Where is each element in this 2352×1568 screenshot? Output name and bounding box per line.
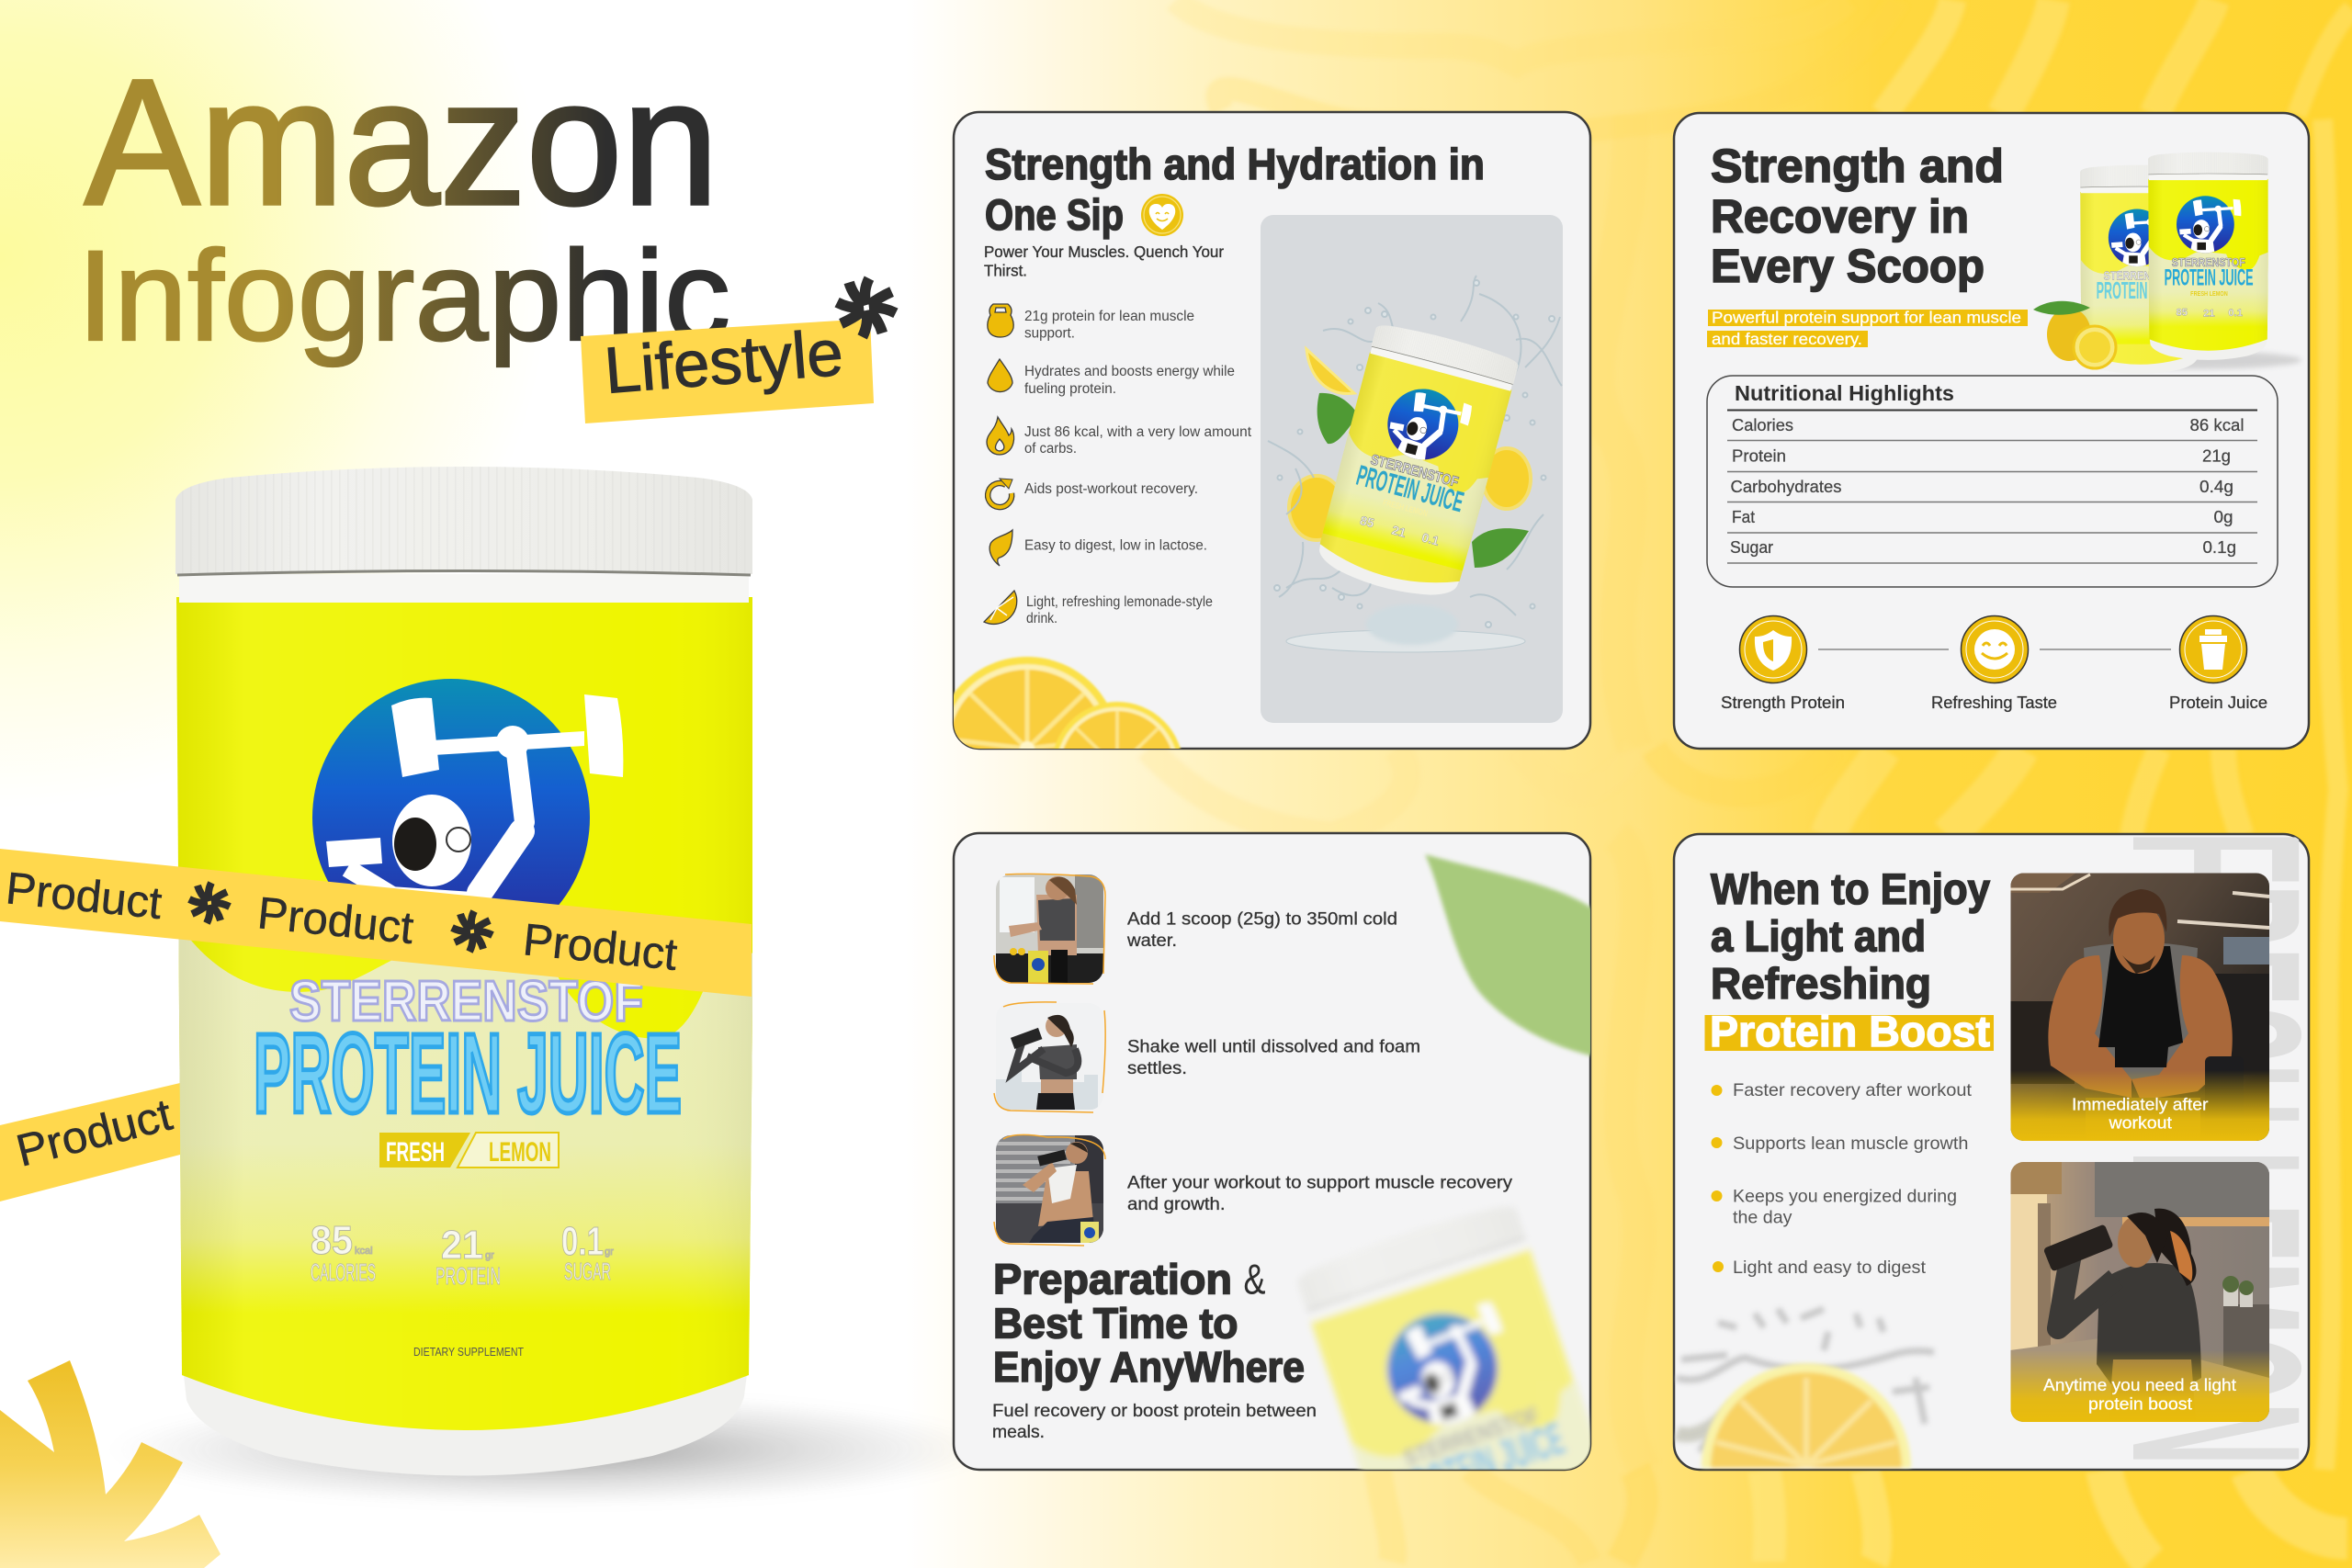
- jar label: stats: CALORIES: [311, 1258, 376, 1286]
- highlighted subheading: [1707, 309, 2028, 348]
- decorative sunburst bottom left: [0, 1360, 220, 1568]
- icon: pinwheel: [189, 883, 230, 923]
- labels: Refreshing Taste: [1931, 693, 2057, 712]
- tilted product jar: 85: [1359, 513, 1376, 531]
- front jar: 85: [2177, 308, 2188, 319]
- back jar: [2080, 165, 2201, 375]
- jar label: flavour tag: FRESH: [386, 1137, 445, 1168]
- back jar: PROTEIN JUICE: [2097, 278, 2185, 304]
- text: protein: 21g protein for lean muscle: [1024, 309, 1194, 324]
- product jars with lemon: [2033, 152, 2301, 375]
- step 1 thumbnail: [994, 874, 1105, 984]
- icon: kettlebell: [988, 304, 1013, 337]
- subheading: Power Your Muscles. Quench Your: [984, 243, 1224, 261]
- product splash photo: [1261, 215, 1563, 723]
- tilted product jar: STERRENSTOF: [1369, 452, 1460, 491]
- icon: tasty smile: [1961, 615, 2029, 683]
- icon: pinwheel: [452, 911, 492, 952]
- step 1 text: Add 1 scoop (25g) to 350ml cold: [1127, 909, 1397, 930]
- lemon and leaf: [2033, 301, 2116, 368]
- text: digest: Easy to digest, low in lactose.: [1024, 538, 1207, 553]
- photo: woman drinking: [2010, 1162, 2269, 1422]
- icon: black pinwheel star: [837, 278, 896, 337]
- heading: Strength and Hydration in: [985, 140, 1485, 188]
- subheading: Thirst.: [984, 261, 1027, 279]
- front jar: 0.1: [2228, 308, 2243, 319]
- blurred tilted jar: STERRENSTOF: [1401, 1403, 1543, 1472]
- title: Amazon Infographic: Amazon: [85, 42, 718, 243]
- benefit bullets: Keeps you energized during: [1733, 1187, 1957, 1207]
- ribbon: lower left product band: [0, 1083, 180, 1201]
- nutrition table: 0g: [2214, 507, 2233, 526]
- ribbon: main product band: Product: [521, 915, 680, 980]
- text: kcal: Just 86 kcal, with a very low amount: [1024, 424, 1252, 440]
- nutrition table: 21g: [2202, 446, 2231, 465]
- highlighted subheading: Powerful protein support for lean muscle: [1712, 309, 2021, 327]
- heading: Refreshing: [1711, 959, 1931, 1008]
- caption: [2043, 1375, 2236, 1413]
- benefit bullets: [1711, 1080, 1973, 1278]
- jar label: stats: SUGAR: [564, 1258, 611, 1285]
- heading: One Sip: [985, 190, 1124, 239]
- jar label: stats: kcal: [355, 1246, 373, 1257]
- nutrition table: Sugar: [1730, 537, 1773, 557]
- benefit bullets: Supports lean muscle growth: [1733, 1134, 1968, 1154]
- heading: [1711, 864, 1990, 1008]
- tilted product jar: FRESH LEMON: [1382, 498, 1429, 518]
- icon: water drop: [988, 359, 1012, 392]
- icon: smiling heart: [1141, 194, 1183, 236]
- heading: Preparation: [993, 1255, 1232, 1303]
- heading: Recovery in: [1711, 190, 1969, 243]
- back jar: STERRENSTOF: [2104, 268, 2177, 282]
- water base: [1286, 604, 1525, 652]
- highlighted subheading: and faster recovery.: [1712, 330, 1862, 348]
- text: protein: [1024, 309, 1194, 342]
- ribbon: lower left product band: Product: [12, 1090, 177, 1177]
- text: lemonade: Light, refreshing lemonade-style: [1026, 594, 1213, 610]
- step 2 text: Shake well until dissolved and foam: [1127, 1036, 1420, 1056]
- icon: shield: [1740, 615, 1806, 683]
- caption: workout: [2108, 1113, 2172, 1132]
- step 2 text: settles.: [1127, 1058, 1187, 1078]
- tag: Lifestyle: Lifestyle: [602, 317, 845, 408]
- tagline: Fuel recovery or boost protein between: [992, 1401, 1317, 1421]
- step 2 thumbnail: [994, 1002, 1105, 1112]
- labels: Protein Juice: [2169, 693, 2267, 712]
- text: recovery: Aids post-workout recovery.: [1024, 481, 1198, 497]
- caption: [2072, 1095, 2209, 1132]
- jar label: stats: PROTEIN: [435, 1262, 501, 1290]
- tagline: meals.: [992, 1422, 1045, 1442]
- step 3 thumbnail: [994, 1134, 1105, 1246]
- blurred tilted jar: PROTEIN JUICE: [1392, 1413, 1570, 1515]
- heading: [993, 1255, 1305, 1391]
- blurred tilted jar: [1299, 1208, 1590, 1470]
- lemon slices decoration: [954, 656, 1182, 749]
- heading: a Light and: [1711, 911, 1926, 961]
- heading: [985, 140, 1485, 239]
- panel: strength and hydration: [935, 112, 1590, 840]
- ground shadow under main jar: [110, 1393, 992, 1506]
- jar label: stats: gr: [605, 1247, 614, 1258]
- lemons and leaves behind jar: [1289, 349, 1531, 568]
- main product jar: [175, 467, 763, 1479]
- subheading: [984, 243, 1224, 279]
- front jar: FRESH LEMON: [2190, 289, 2228, 298]
- nutrition table: Nutritional Highlights: [1735, 381, 1954, 405]
- jar label: flavour tag: [379, 1133, 559, 1168]
- panel: strength and recovery: [1674, 113, 2309, 749]
- text: hydrates: fueling protein.: [1024, 381, 1116, 397]
- front jar: PROTEIN JUICE: [2165, 265, 2254, 290]
- text: lemonade: drink.: [1026, 611, 1057, 626]
- tagline: [992, 1401, 1317, 1442]
- jar label: flavour tag: LEMON: [489, 1137, 551, 1168]
- jar label: brand: STERRENSTOF: [289, 970, 643, 1033]
- heading: &: [1244, 1255, 1266, 1303]
- nutrition table: 0.4g: [2199, 477, 2233, 496]
- photo: man after workout: [2010, 873, 2269, 1141]
- benefit bullets: the day: [1733, 1207, 1792, 1227]
- ribbon: main product band: Product: [255, 888, 416, 953]
- benefit bullets: Light and easy to digest: [1733, 1258, 1927, 1278]
- icon: shaker: [2179, 615, 2247, 683]
- title: Amazon Infographic: [77, 42, 730, 367]
- heading: Strength and: [1711, 140, 2004, 192]
- ribbon: main product band: Product: [4, 863, 164, 929]
- text: kcal: [1024, 424, 1252, 457]
- blurred water splash: [1677, 1309, 1934, 1451]
- tilted product jar: PROTEIN JUICE: [1353, 459, 1467, 518]
- nutrition table: 0.1g: [2203, 537, 2236, 557]
- step 3 text: [1127, 1172, 1512, 1214]
- nutrition table: [1707, 376, 2278, 587]
- front jar: STERRENSTOF: [2172, 255, 2245, 269]
- text: kcal: of carbs.: [1024, 441, 1077, 457]
- icon: recovery arrow: [988, 479, 1012, 507]
- caption: protein boost: [2088, 1394, 2192, 1413]
- heading: When to Enjoy: [1711, 864, 1990, 913]
- blurred green leaf: [1425, 854, 1594, 1056]
- panel: preparation: [954, 833, 1611, 1557]
- highlighted heading: Protein Boost: [1710, 1007, 1990, 1055]
- jar label: stats: [311, 1218, 614, 1290]
- ribbon: main product band: [0, 849, 752, 997]
- labels: [1721, 693, 2267, 712]
- text: protein: support.: [1024, 325, 1075, 342]
- icon: flame: [987, 417, 1014, 455]
- heading: [1711, 140, 2004, 292]
- tilted product jar: [1311, 320, 1523, 608]
- caption: Anytime you need a light: [2043, 1375, 2236, 1394]
- nutrition table: Carbohydrates: [1731, 477, 1841, 496]
- text: hydrates: Hydrates and boosts energy while: [1024, 364, 1235, 379]
- main product jar: PROTEIN JUICE: [254, 1011, 682, 1137]
- icon: leaf: [989, 530, 1012, 566]
- nutrition table: Calories: [1732, 415, 1793, 434]
- text: lemonade: [1026, 594, 1213, 626]
- front jar: 21: [2203, 309, 2215, 320]
- title: Amazon Infographic: Infographic: [77, 223, 730, 367]
- feature icons row: [1721, 615, 2267, 712]
- step 3 text: and growth.: [1127, 1194, 1226, 1214]
- jar label: stats: 21: [441, 1223, 483, 1268]
- tilted product jar: 21: [1390, 524, 1408, 540]
- jar label: supplement note: DIETARY SUPPLEMENT: [413, 1345, 524, 1359]
- jar label: stats: gr: [485, 1250, 494, 1261]
- nutrition table: Fat: [1732, 507, 1755, 526]
- heading: Best Time to: [993, 1299, 1238, 1347]
- caption: Immediately after: [2072, 1095, 2209, 1113]
- tilted product jar: 0.1: [1420, 531, 1441, 548]
- step 2 text: [1127, 1036, 1420, 1078]
- step 3 text: After your workout to support muscle recovery: [1127, 1172, 1512, 1192]
- step 1 text: [1126, 909, 1397, 951]
- text: hydrates: [1024, 364, 1235, 397]
- blurred lemon: [1702, 1363, 1911, 1468]
- benefit list: [984, 304, 1252, 626]
- panel: when to enjoy: [1674, 831, 2351, 1470]
- splash strokes: [1268, 276, 1562, 627]
- step 1 text: water.: [1126, 931, 1177, 951]
- labels: Strength Protein: [1721, 693, 1845, 712]
- front jar: [2148, 152, 2270, 361]
- heading: Enjoy AnyWhere: [993, 1343, 1305, 1391]
- icon: lemon wedge: [984, 591, 1017, 624]
- nutrition table: Protein: [1732, 446, 1786, 465]
- jar label: stats: 0.1: [561, 1219, 604, 1264]
- benefit bullets: Faster recovery after workout: [1733, 1080, 1973, 1100]
- nutrition table: 86 kcal: [2190, 415, 2244, 434]
- jar label: stats: 85: [311, 1218, 353, 1263]
- heading: Every Scoop: [1711, 240, 1984, 292]
